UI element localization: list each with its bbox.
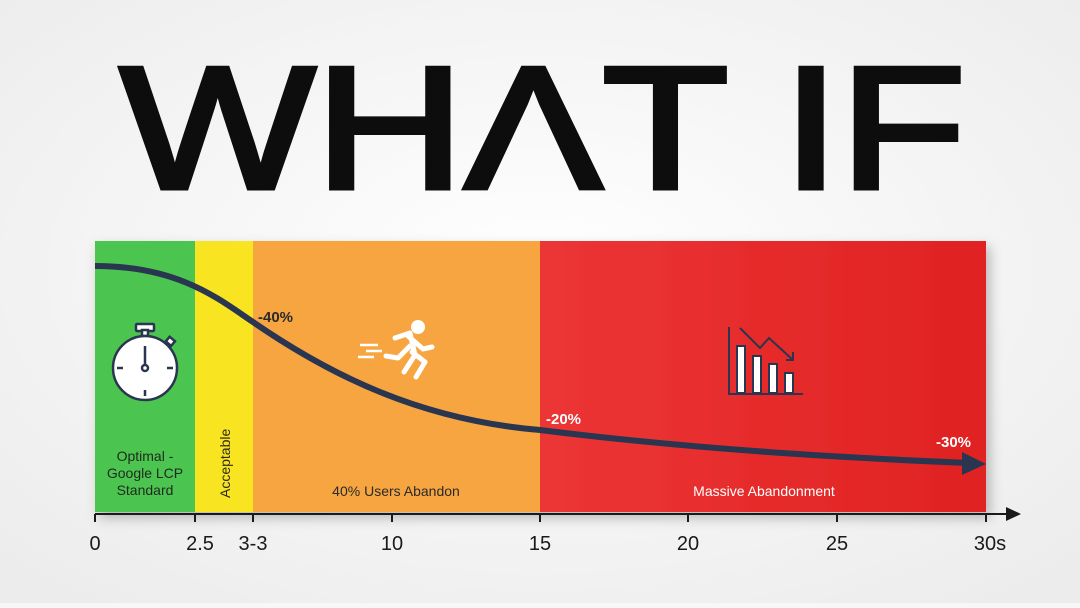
label -30%: -30%	[936, 434, 971, 451]
axis labels: 15	[529, 533, 551, 555]
label -40%: -40%	[258, 309, 293, 326]
curve arrow	[95, 266, 986, 475]
label optimal: Standard	[117, 482, 173, 498]
label -20%: -20%	[546, 411, 581, 428]
label orange zone: 40% Users Abandon	[332, 483, 460, 499]
axis labels	[89, 533, 1006, 555]
axis labels: 10	[381, 533, 403, 555]
label acceptable: Acceptable	[217, 429, 233, 498]
icon: runner	[358, 320, 432, 377]
axis	[95, 507, 1021, 522]
label optimal: Google LCP	[107, 465, 183, 481]
axis labels: 30s	[974, 533, 1006, 555]
label red zone: Massive Abandonment	[693, 483, 835, 499]
axis labels: 25	[826, 533, 848, 555]
icon: stopwatch	[113, 324, 177, 400]
axis labels: 20	[677, 533, 699, 555]
axis labels: 2.5	[186, 533, 214, 555]
label optimal: Optimal -	[117, 448, 174, 464]
icon: bar chart down	[729, 327, 803, 394]
axis labels: 3-3	[239, 533, 267, 555]
chart	[95, 241, 986, 512]
title: WHΛT IF	[120, 30, 966, 225]
axis labels: 0	[89, 533, 101, 555]
